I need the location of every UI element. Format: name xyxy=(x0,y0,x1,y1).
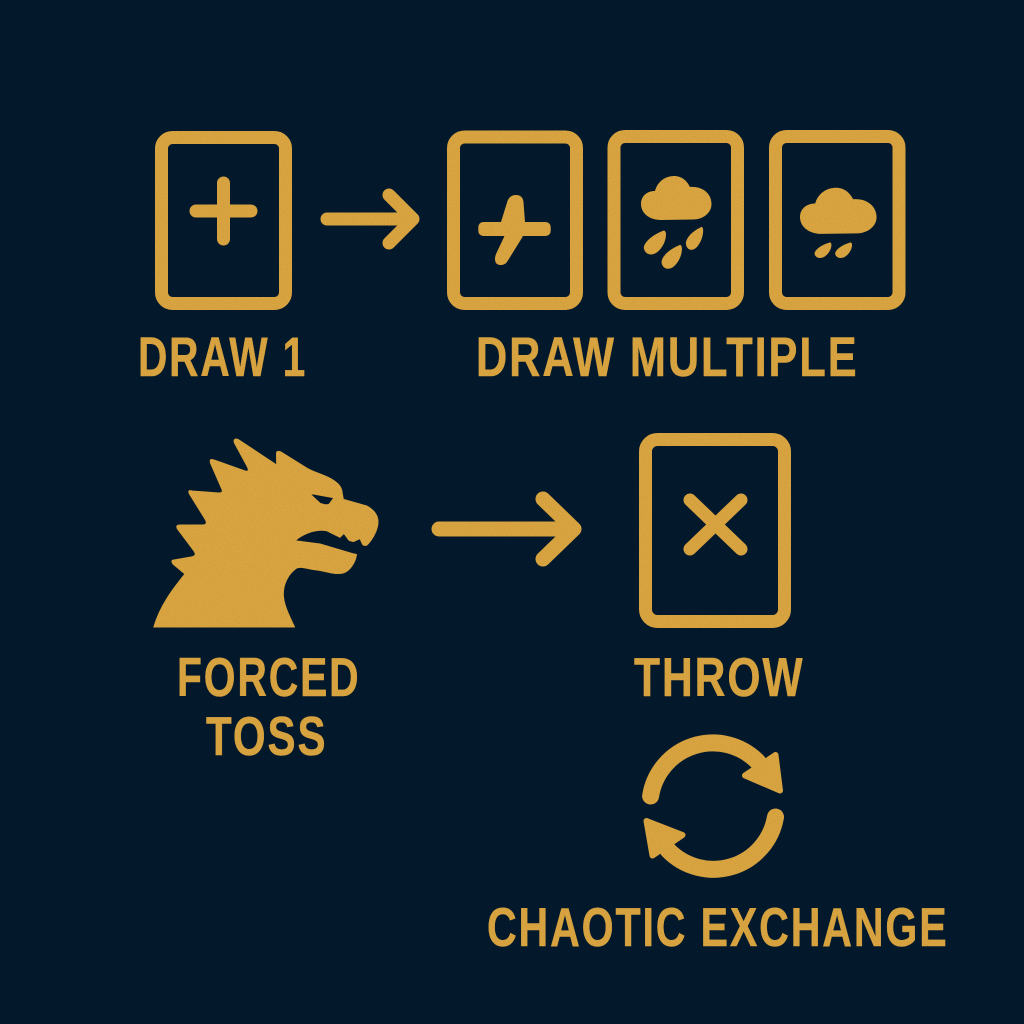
arrow: draw 1 to draw multiple xyxy=(327,195,413,243)
icon: dragon head xyxy=(154,439,378,627)
label: throw: THROW xyxy=(634,646,804,708)
label: draw 1: DRAW 1 xyxy=(138,325,307,388)
icon: card with cloud and two raindrops xyxy=(776,136,899,304)
icon: card with plus xyxy=(162,138,286,304)
label: forced toss: TOSS xyxy=(206,705,328,767)
icon: exchange arrows xyxy=(646,743,780,869)
icon: card with plane xyxy=(454,137,576,304)
icon: card with cloud and three raindrops xyxy=(614,136,738,304)
arrow: forced toss to throw xyxy=(439,499,574,559)
label: draw multiple: DRAW MULTIPLE xyxy=(476,325,858,388)
label: forced toss: FORCED xyxy=(177,646,360,708)
icon: card with x xyxy=(646,440,784,622)
label: forced toss xyxy=(177,646,360,767)
